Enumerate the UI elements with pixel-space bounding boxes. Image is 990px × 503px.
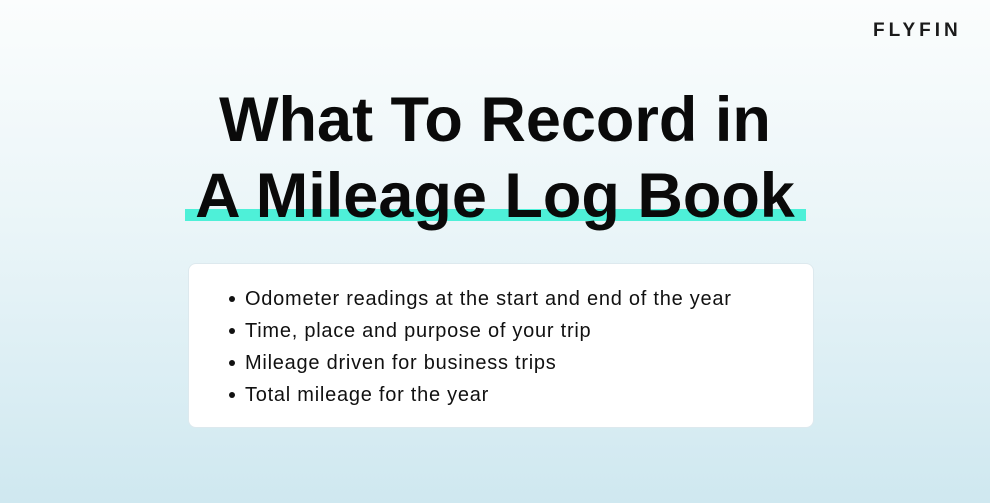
title — [195, 85, 795, 231]
bullet list: Total mileage for the year — [245, 384, 489, 406]
bullet list: Odometer readings at the start and end of the year — [245, 288, 732, 310]
bullet list — [229, 288, 732, 406]
title: A Mileage Log Book — [195, 161, 795, 231]
logo: FLYFIN — [873, 20, 962, 41]
bullet list: Mileage driven for business trips — [245, 352, 557, 374]
title highlight — [185, 209, 806, 221]
panel: list card — [188, 263, 814, 428]
title: What To Record in — [219, 85, 771, 155]
bullet list: Time, place and purpose of your trip — [245, 320, 591, 342]
